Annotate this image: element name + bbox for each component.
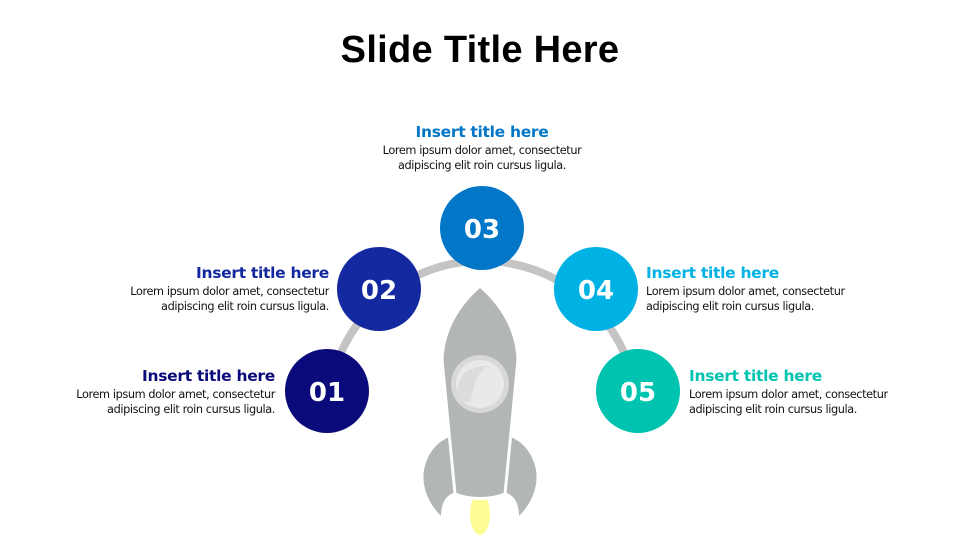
text 03: Insert title here [416,123,548,141]
arc connector [333,261,632,375]
circle 02 [337,247,421,331]
rocket [423,286,537,535]
text 01: Insert title here [142,367,275,385]
circle 01 [285,349,369,433]
circle 05: 05 [620,378,656,408]
circle 03: 03 [464,215,500,245]
text 03: adipiscing elit roin cursus ligula. [398,159,566,172]
text 02: Insert title here [196,264,329,282]
text 03: Lorem ipsum dolor amet, consectetur [383,144,581,157]
text 05: Insert title here [689,367,822,385]
circle 04 [554,247,638,331]
text 04: Lorem ipsum dolor amet, consectetur [646,285,845,298]
text 05: adipiscing elit roin cursus ligula. [689,403,857,416]
text 04: Insert title here [646,264,779,282]
circle 02: 02 [361,276,397,306]
text 03 [383,123,582,172]
text 05 [689,367,888,416]
text 02: Lorem ipsum dolor amet, consectetur [130,285,329,298]
text 01: adipiscing elit roin cursus ligula. [107,403,275,416]
circle 03 [440,186,524,270]
text 02: adipiscing elit roin cursus ligula. [161,300,329,313]
circle 04: 04 [578,276,614,306]
circle 05 [596,349,680,433]
text 02 [130,264,330,313]
text 04: adipiscing elit roin cursus ligula. [646,300,814,313]
title: Slide Title Here [341,29,619,71]
text 04 [646,264,846,313]
text 01 [76,367,276,416]
circle 01: 01 [309,378,345,408]
text 05: Lorem ipsum dolor amet, consectetur [689,388,888,401]
text 01: Lorem ipsum dolor amet, consectetur [76,388,275,401]
